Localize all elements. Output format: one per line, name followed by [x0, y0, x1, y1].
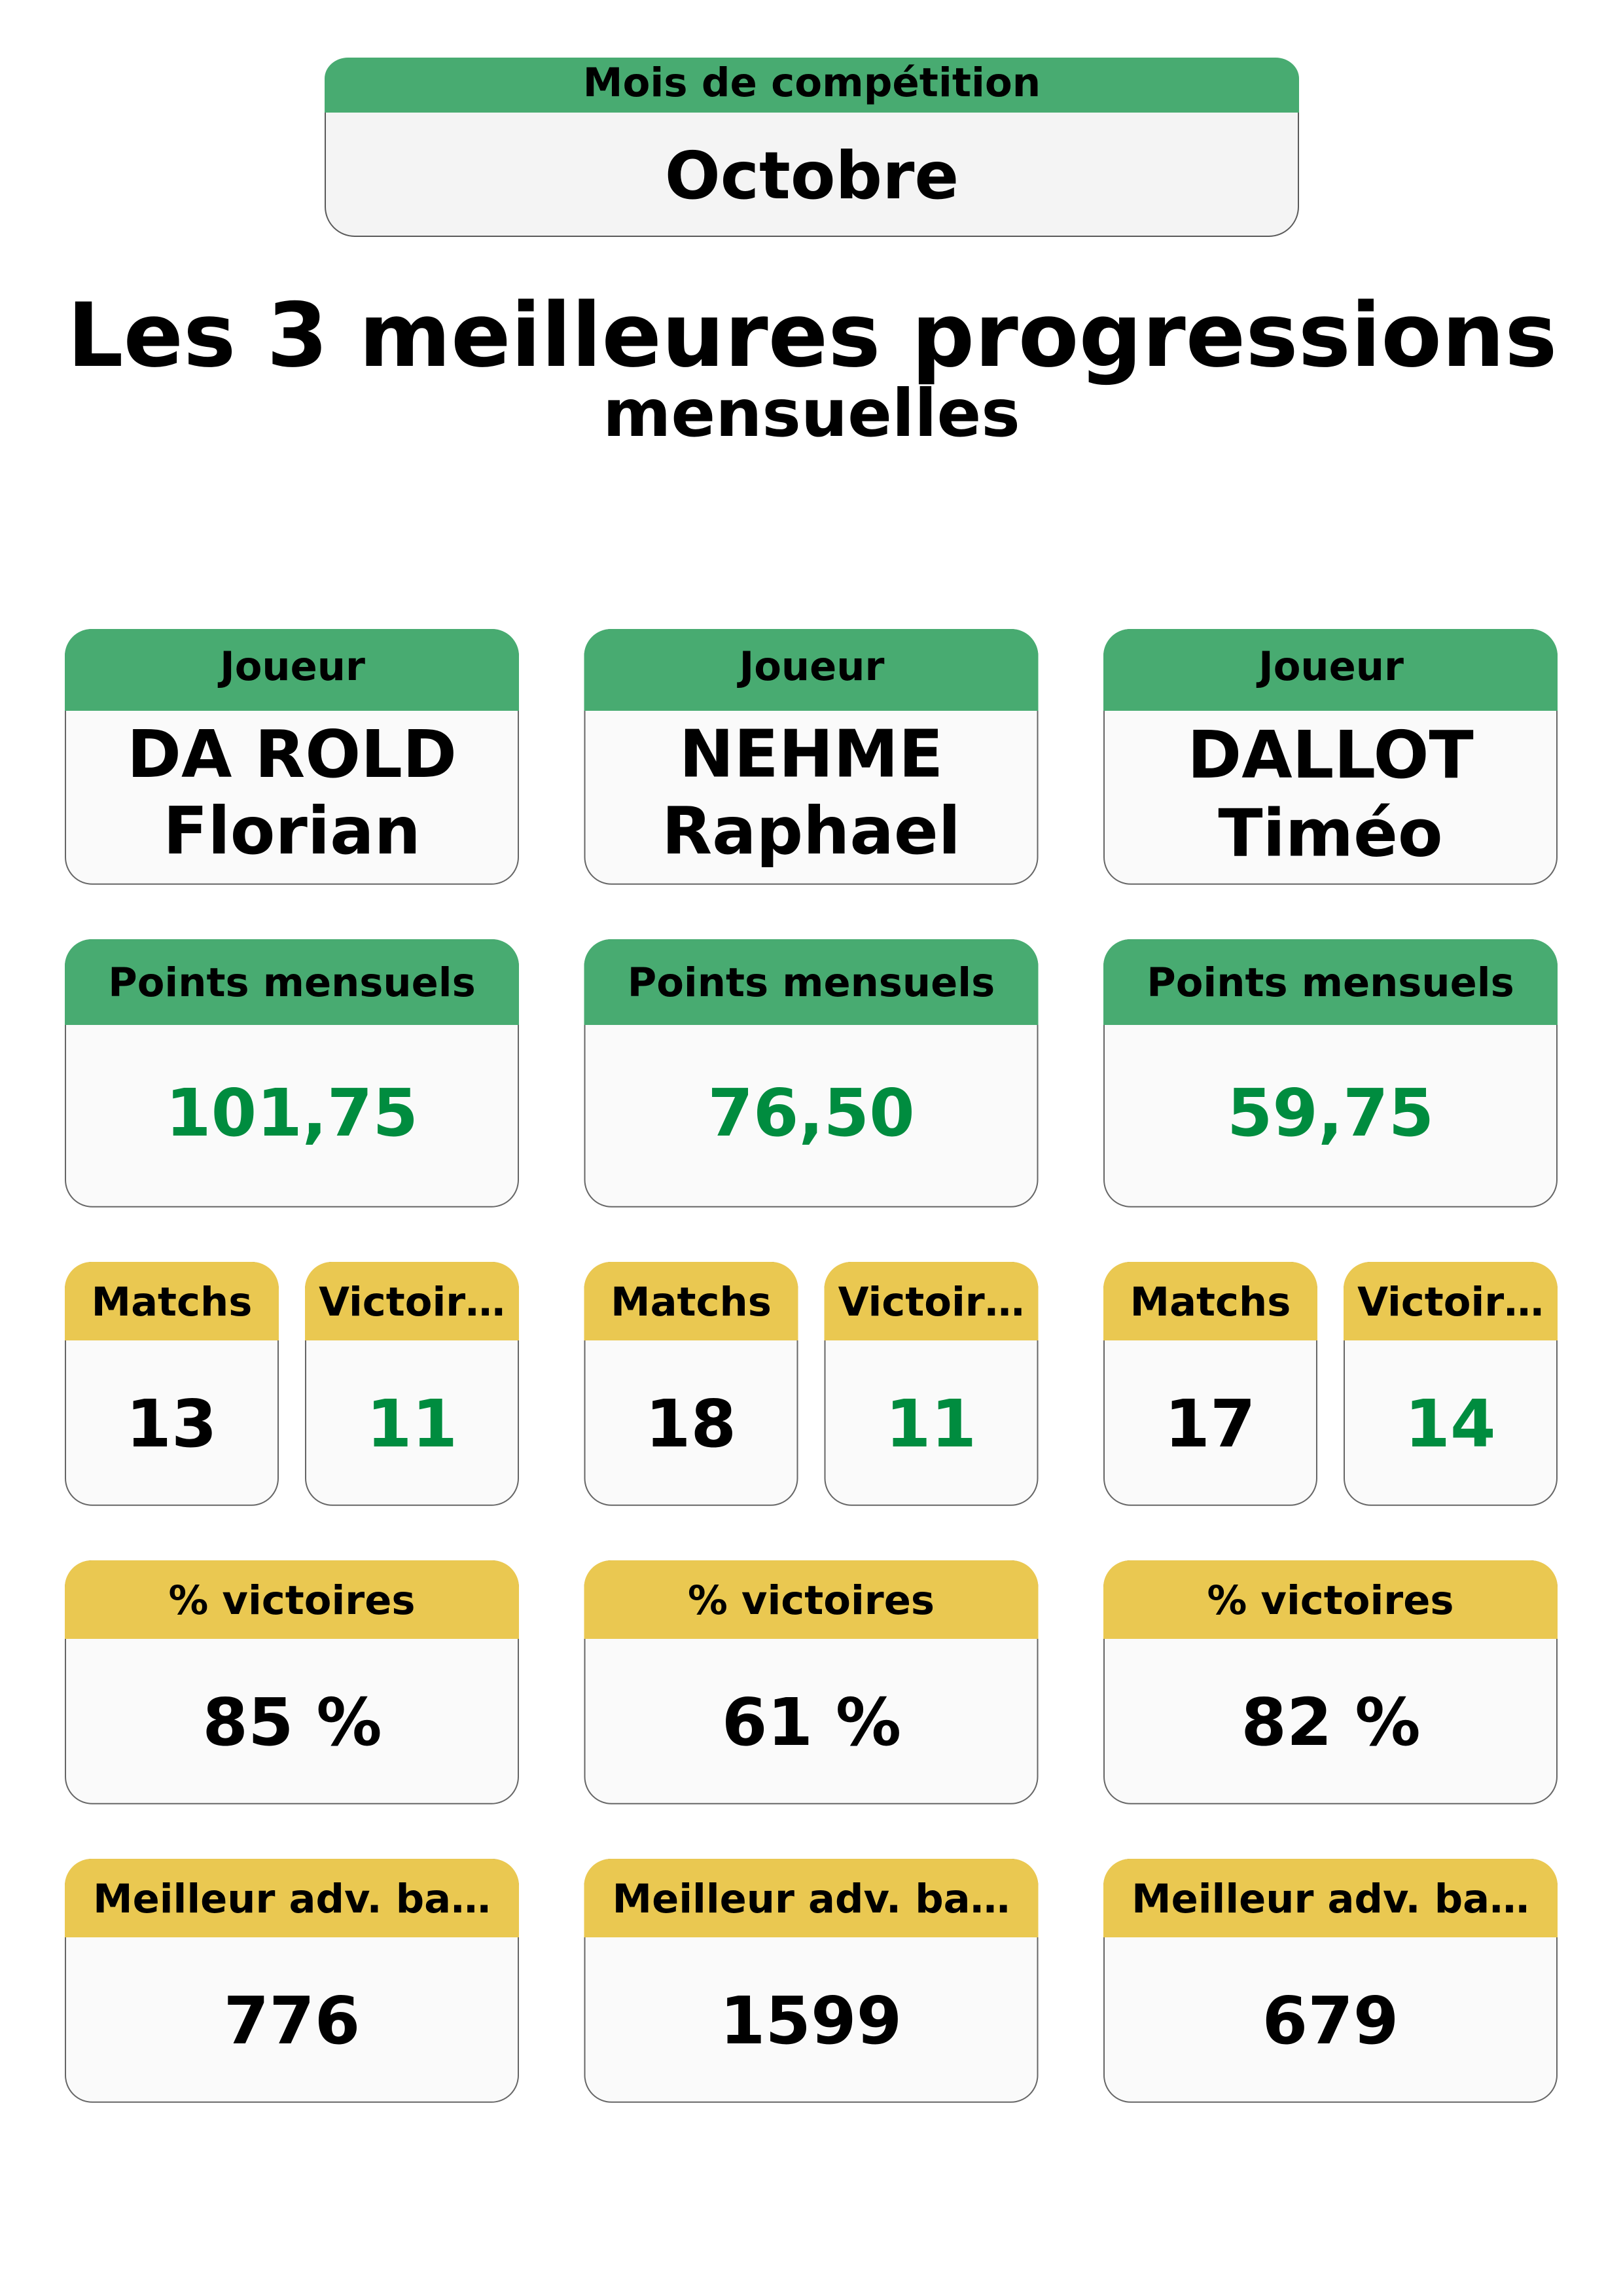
month value: Octobre: [665, 137, 959, 214]
header: win percentage: % victoires: [688, 1578, 935, 1624]
panel: player 2 monthly points: [584, 939, 1038, 1207]
panel: month of competition: [325, 58, 1299, 236]
value: 17: 17: [1164, 1386, 1256, 1462]
value: 85 %: 85 %: [202, 1684, 382, 1761]
header: win percentage: [1103, 1560, 1558, 1639]
header: win percentage: % victoires: [1207, 1578, 1454, 1624]
header: wins: [305, 1262, 519, 1340]
value: 11: 11: [885, 1386, 976, 1462]
title: Les 3 meilleures progressions: [67, 284, 1558, 387]
header: month label: Mois de compétition: [583, 60, 1041, 106]
value: 101,75: 101,75: [166, 1075, 418, 1151]
subtitle: mensuelles: [603, 375, 1020, 452]
value: 776: 776: [224, 1982, 360, 2059]
header: player 2: Joueur: [737, 644, 884, 690]
name: DALLOT Timéo: [1187, 717, 1474, 872]
value: 679: 679: [1262, 1982, 1399, 2059]
header: matches: Matchs: [1130, 1280, 1291, 1325]
header: matches: Matchs: [611, 1280, 772, 1325]
value: 14: 14: [1404, 1386, 1496, 1462]
panel: player 3 matches: [1103, 1262, 1317, 1505]
value: 18: 18: [645, 1386, 736, 1462]
header: wins: Victoir…: [319, 1280, 505, 1325]
panel: player 3 monthly points: [1103, 939, 1558, 1207]
header: wins: Victoir…: [838, 1280, 1024, 1325]
value: 59,75: 59,75: [1227, 1075, 1434, 1151]
panel: player 1 name: [65, 629, 519, 884]
name: DA ROLD Florian: DA ROLD: [127, 716, 457, 793]
panel: player 1 win percentage: [65, 1560, 519, 1804]
header: player 3: [1103, 629, 1558, 711]
header: win percentage: [584, 1560, 1038, 1639]
header: wins: Victoir…: [1357, 1280, 1544, 1325]
value: 76,50: 76,50: [707, 1075, 915, 1151]
header: matches: Matchs: [92, 1280, 252, 1325]
header: matches: [584, 1262, 798, 1340]
panel: player 3 win percentage: [1103, 1560, 1558, 1804]
name: NEHME Raphael: NEHME: [679, 716, 943, 792]
header: best opponent: Meilleur adv. ba…: [613, 1876, 1010, 1922]
header: wins: [825, 1262, 1038, 1340]
name: NEHME Raphael: Raphael: [662, 793, 961, 869]
panel: player 1 matches: [65, 1262, 279, 1505]
header: month label: [325, 58, 1299, 113]
header: monthly points: Points mensuels: [628, 960, 995, 1006]
panel: player 2 name: [584, 629, 1038, 884]
value: 61 %: 61 %: [722, 1684, 901, 1761]
value: 82 %: 82 %: [1241, 1684, 1421, 1761]
panel: player 3 wins: [1344, 1262, 1558, 1505]
header: best opponent: Meilleur adv. ba…: [93, 1876, 491, 1922]
header: wins: [1344, 1262, 1558, 1340]
header: win percentage: % victoires: [169, 1578, 415, 1624]
header: matches: [1103, 1262, 1317, 1340]
value: 1599: 1599: [720, 1982, 902, 2059]
header: player 1: [65, 629, 519, 711]
panel: player 2 win percentage: [584, 1560, 1038, 1804]
value: 13: 13: [126, 1386, 217, 1462]
header: monthly points: [65, 939, 519, 1025]
header: player 2: [584, 629, 1038, 711]
panel: player 3 name: [1103, 629, 1558, 884]
header: player 1: Joueur: [217, 644, 365, 690]
header: monthly points: Points mensuels: [1147, 960, 1514, 1006]
panel: player 2 wins: [825, 1262, 1038, 1505]
panel: player 1 wins: [305, 1262, 519, 1505]
name: DALLOT Timéo: DALLOT: [1187, 717, 1474, 793]
header: monthly points: [584, 939, 1038, 1025]
header: monthly points: [1103, 939, 1558, 1025]
name: DA ROLD Florian: Florian: [163, 793, 421, 869]
header: player 3: Joueur: [1256, 644, 1404, 690]
name: DALLOT Timéo: Timéo: [1218, 795, 1443, 872]
panel: player 1 best opponent: [65, 1859, 519, 2102]
header: best opponent: Meilleur adv. ba…: [1132, 1876, 1529, 1922]
panel: player 2 matches: [584, 1262, 798, 1505]
panel: player 1 monthly points: [65, 939, 519, 1207]
header: matches: [65, 1262, 279, 1340]
value: 11: 11: [366, 1386, 457, 1462]
header: best opponent: [65, 1859, 519, 1937]
header: monthly points: Points mensuels: [108, 960, 476, 1006]
name: NEHME Raphael: [662, 716, 961, 869]
panel: player 2 best opponent: [584, 1859, 1038, 2102]
header: win percentage: [65, 1560, 519, 1639]
name: DA ROLD Florian: [127, 716, 457, 869]
header: best opponent: [1103, 1859, 1558, 1937]
header: best opponent: [584, 1859, 1038, 1937]
panel: player 3 best opponent: [1103, 1859, 1558, 2102]
